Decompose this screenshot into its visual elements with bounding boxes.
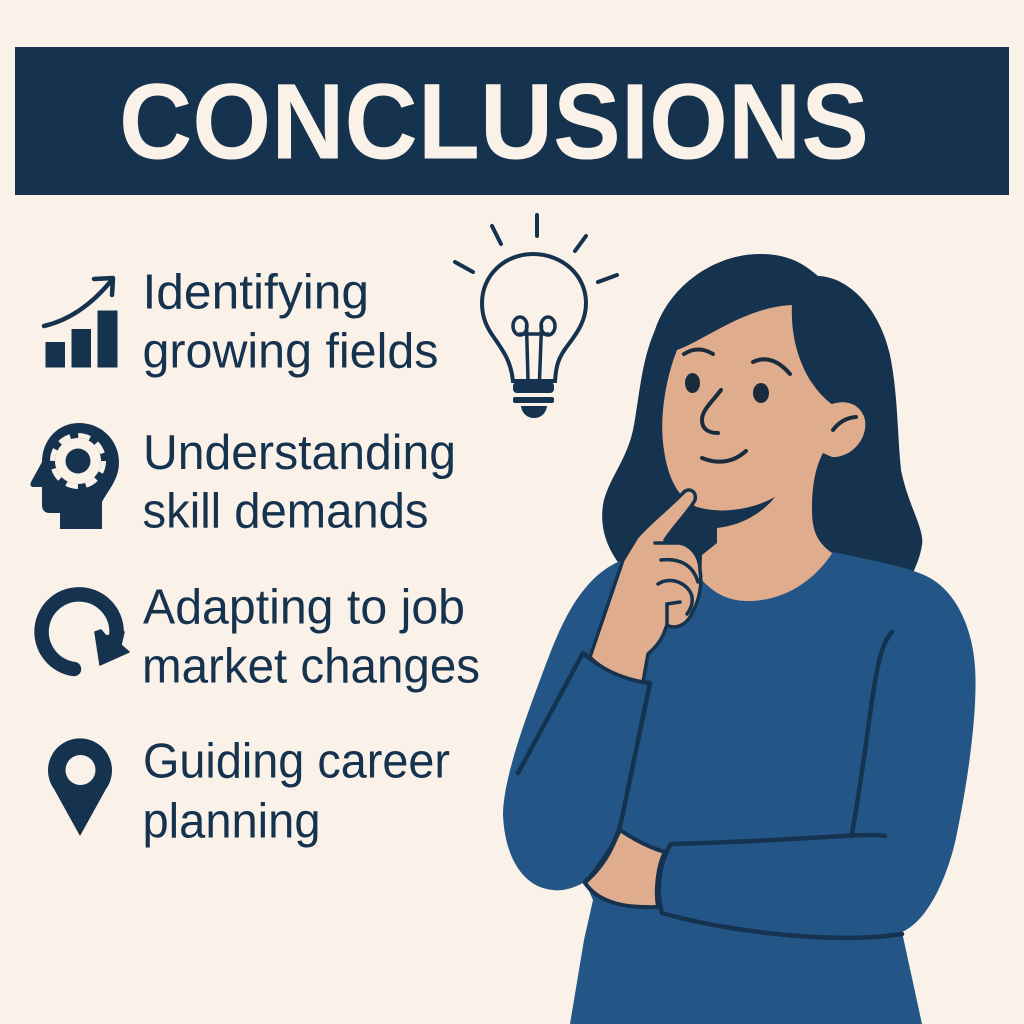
text: adapting to job market changes: Adapting to job: [143, 580, 465, 634]
text: guiding career planning: planning: [142, 794, 320, 848]
text: adapting to job market changes: [142, 580, 480, 694]
title banner: CONCLUSIONS: [119, 60, 869, 182]
eyebrows, eyes, nose, mouth, ear line: [684, 350, 856, 462]
icon: circular arrow: [42, 594, 129, 669]
title banner: [15, 47, 1009, 195]
sweater: [503, 552, 976, 1024]
raised hand: [590, 490, 701, 682]
text: understanding skill demands: skill demands: [142, 484, 428, 538]
hair: [602, 254, 922, 575]
text: identifying growing fields: Identifying: [142, 266, 369, 320]
sleeve and arm lines: [518, 632, 902, 938]
icon: growth chart: [44, 278, 118, 368]
text: guiding career planning: [142, 734, 450, 848]
text: guiding career planning: Guiding career: [143, 734, 450, 788]
text: identifying growing fields: [142, 266, 438, 378]
icon: map pin: [48, 738, 112, 836]
text: adapting to job market changes: market changes: [142, 640, 480, 694]
text: understanding skill demands: [142, 426, 456, 538]
text: understanding skill demands: Understanding: [143, 426, 456, 480]
lower hand: [585, 830, 665, 907]
icon: light bulb: [455, 215, 617, 418]
woman character: [503, 254, 976, 1024]
icon: head with gear: [30, 423, 119, 529]
ear: [823, 402, 865, 457]
text: identifying growing fields: growing fields: [142, 324, 438, 378]
face and neck: [662, 305, 835, 612]
